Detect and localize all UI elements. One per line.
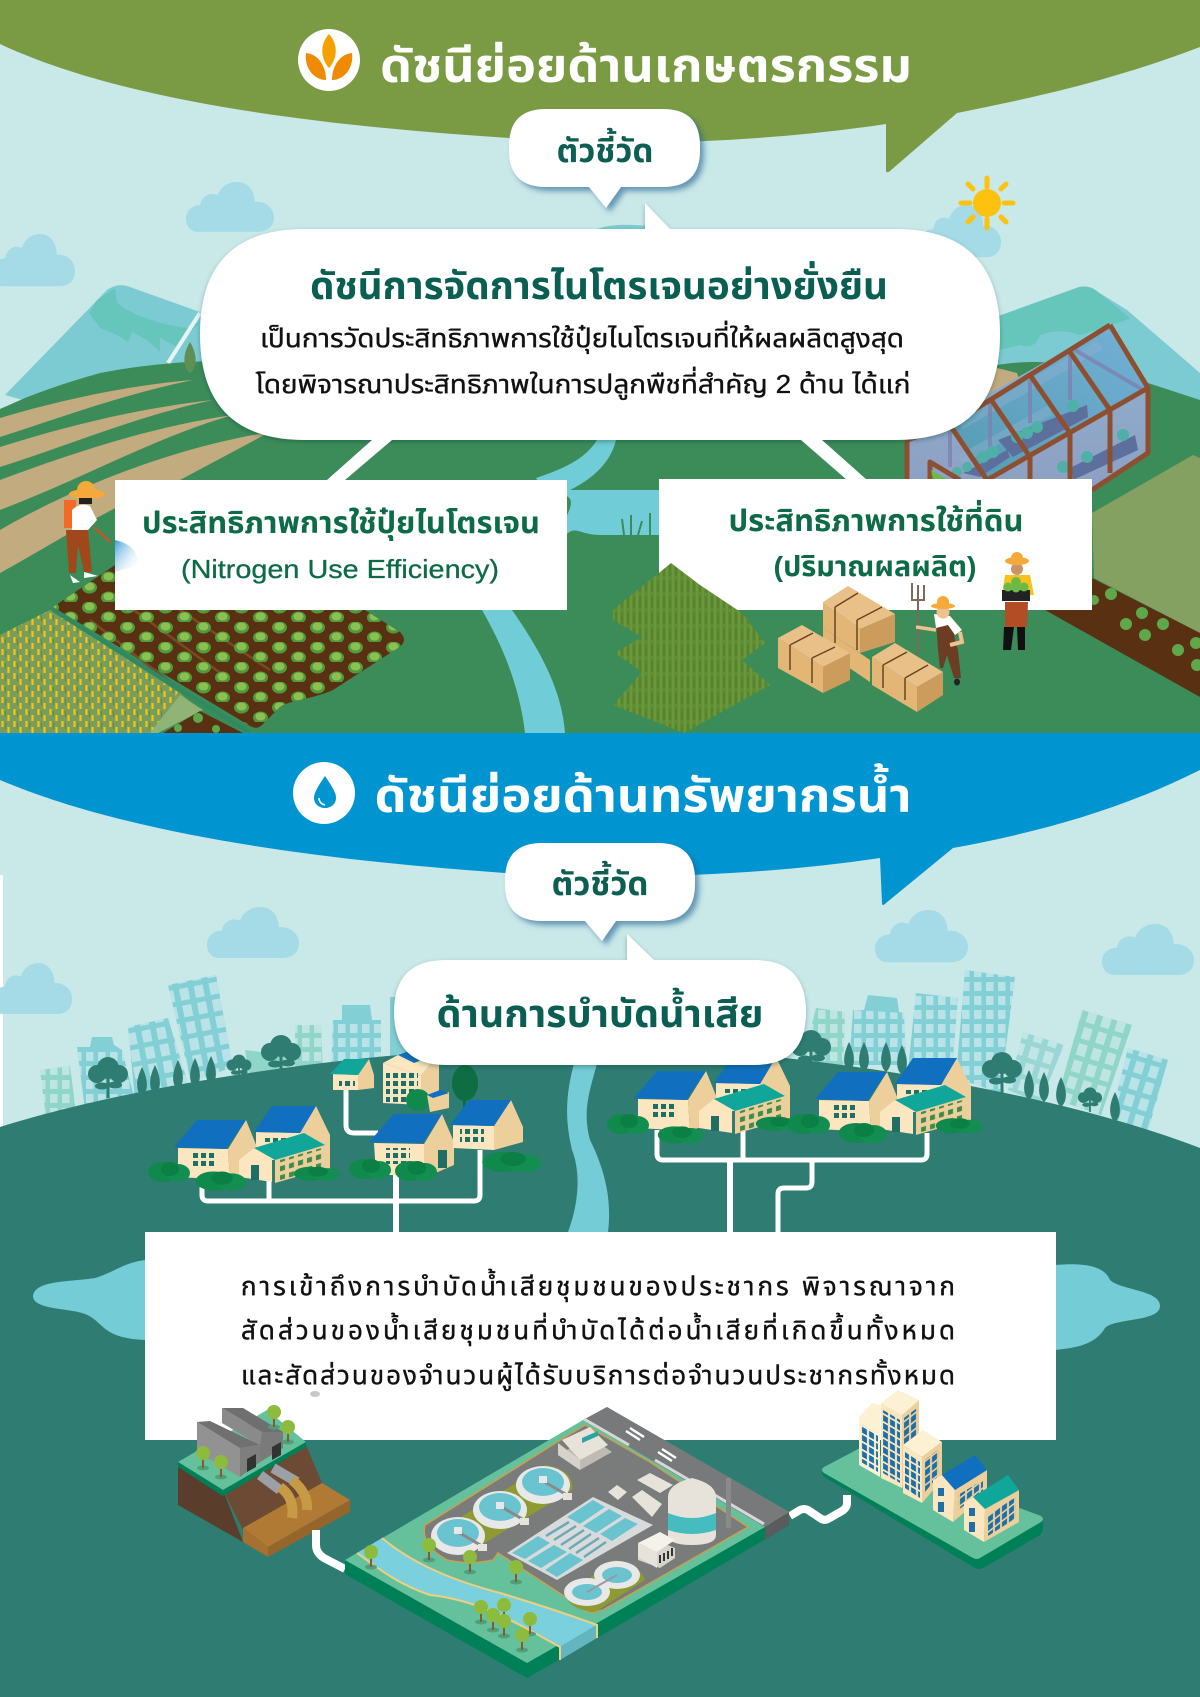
connecting pipes bbox=[316, 1495, 847, 1569]
bushes left bbox=[148, 1152, 541, 1190]
cabbage field bbox=[53, 565, 404, 728]
basins bbox=[507, 1497, 653, 1580]
heading: agriculture: ดัชนีย่อยด้านเกษตรกรรม bbox=[380, 39, 912, 92]
icon: sun bbox=[961, 178, 1013, 228]
asphalt pad bbox=[424, 1425, 748, 1613]
river upper and pond bbox=[482, 440, 659, 733]
cypress on hill bbox=[184, 342, 196, 373]
olive field right bbox=[1092, 455, 1200, 633]
centre houses bbox=[369, 1100, 523, 1178]
box: nitrogen use efficiency: (Nitrogen Use Efficiency) bbox=[181, 554, 499, 584]
box: wastewater description: การเข้าถึงการบำบัดน้ำเสียชุมชนของประชากร พิจารณาจาก bbox=[241, 1268, 955, 1302]
small teal house bbox=[330, 1059, 374, 1090]
admin building bbox=[558, 1427, 612, 1470]
panel: agriculture section bbox=[0, 0, 1200, 733]
bubble: sustainable nitrogen index: ดัชนีการจัดการไนโตรเจนอย่างยั่งยืน bbox=[310, 260, 888, 308]
panel: water section bbox=[0, 733, 1200, 1697]
wastewater treatment plant bbox=[345, 1407, 789, 1678]
bubble: indicator label bbox=[509, 109, 700, 208]
city skyline bbox=[40, 970, 1168, 1135]
sewer pipes bbox=[202, 1090, 927, 1232]
river lower bbox=[567, 1060, 609, 1232]
cardboard boxes bbox=[778, 586, 943, 712]
icon: water drop badge bbox=[293, 762, 355, 824]
bubble: sustainable nitrogen index: โดยพิจารณาประสิทธิภาพในการปลูกพืชที่สำคัญ 2 ด้าน ได้แก่ bbox=[256, 366, 910, 400]
factory on hill bbox=[178, 1405, 350, 1557]
clouds top bbox=[0, 182, 1001, 286]
trees skyline bbox=[88, 1030, 1120, 1122]
rice overlap on box bbox=[659, 563, 742, 613]
clouds water section bbox=[0, 907, 1194, 1014]
oval tanks bbox=[564, 1560, 645, 1612]
wheat field bbox=[0, 610, 250, 733]
box: land use efficiency: ประสิทธิภาพการใช้ที่ดิน bbox=[728, 499, 1024, 538]
rice field bbox=[613, 563, 770, 733]
tower left bbox=[859, 1403, 881, 1477]
river in plant bbox=[357, 1538, 597, 1660]
box: nitrogen use efficiency: ประสิทธิภาพการใช้ปุ๋ยไนโตรเจน bbox=[142, 507, 540, 541]
greenhouse bbox=[907, 325, 1150, 490]
mountains bbox=[5, 285, 1200, 430]
bubble: sustainable nitrogen index: เป็นการวัดประสิทธิภาพการใช้ปุ๋ยไนโตรเจนที่ให้ผลผลิตสูงสุด bbox=[260, 320, 904, 354]
bubble: wastewater treatment: ด้านการบำบัดน้ำเสีย bbox=[436, 987, 764, 1036]
houses left group bbox=[148, 1046, 541, 1190]
farmer with pitchfork bbox=[912, 583, 962, 686]
connector lines bbox=[327, 440, 867, 480]
ground hill bbox=[0, 1045, 1200, 1697]
banner: blue title bbox=[0, 733, 1200, 905]
apartment bbox=[383, 1046, 478, 1112]
city island with towers bbox=[822, 1390, 1043, 1569]
tower right bbox=[903, 1430, 942, 1503]
bubble: sustainable nitrogen index bbox=[200, 203, 1000, 440]
silo and chimney bbox=[668, 1478, 731, 1545]
small utility buildings bbox=[608, 1473, 673, 1517]
greenhouse benches bbox=[952, 400, 1138, 480]
blue roof house bbox=[933, 1455, 987, 1522]
teal roof house bbox=[964, 1475, 1019, 1542]
box: land use efficiency bbox=[659, 479, 1092, 610]
heading: water: ดัชนีย่อยด้านทรัพยากรน้ำ bbox=[374, 763, 912, 822]
farmer with sprayer bbox=[64, 481, 138, 583]
tower middle bbox=[881, 1390, 919, 1488]
road bbox=[583, 1407, 789, 1540]
brown crop field right bbox=[1045, 578, 1200, 697]
box: land use efficiency: (ปริมาณผลผลิต) bbox=[774, 551, 976, 582]
bubble: wastewater treatment bbox=[394, 934, 806, 1065]
bubble: indicator label: ตัวชี้วัด bbox=[556, 127, 654, 169]
box: wastewater description: และสัดส่วนของจำนวนผู้ได้รับบริการต่อจำนวนประชากรทั้งหมด bbox=[241, 1358, 955, 1391]
white edge strip bbox=[0, 875, 3, 1127]
trees in plant bbox=[364, 1538, 537, 1652]
bushes right bbox=[607, 1114, 982, 1143]
pond behind text box bbox=[33, 1260, 1160, 1350]
box: nitrogen use efficiency bbox=[115, 480, 567, 610]
tan field stripes bbox=[0, 367, 1040, 573]
sky band bbox=[0, 733, 1200, 1133]
green farmland hills bbox=[0, 345, 1200, 733]
icon: wheat badge bbox=[298, 29, 360, 91]
farmer with basket bbox=[1002, 552, 1034, 650]
box: wastewater description bbox=[145, 1232, 1056, 1440]
houses right groups bbox=[607, 1057, 982, 1143]
banner: green title bbox=[0, 0, 1200, 172]
bubble: indicator label water: ตัวชี้วัด bbox=[552, 860, 648, 902]
bubble: indicator label water bbox=[505, 843, 695, 941]
pump building bbox=[638, 1532, 675, 1568]
clarifier tanks bbox=[431, 1465, 572, 1555]
box: wastewater description: สัดส่วนของน้ำเสียชุมชนที่บำบัดได้ต่อน้ำเสียที่เกิดขึ้นทั้งหมด bbox=[241, 1312, 955, 1346]
